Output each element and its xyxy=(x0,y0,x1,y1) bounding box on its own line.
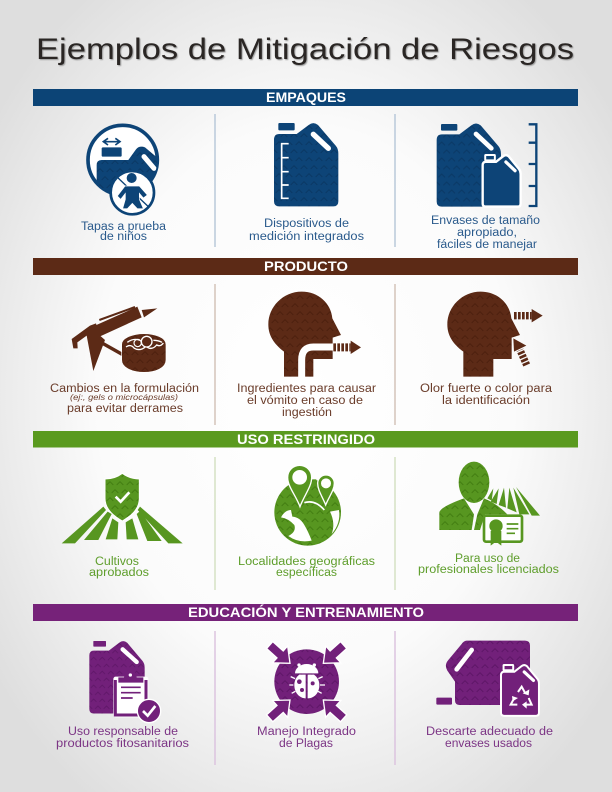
caption: ingredientes: ingestión xyxy=(282,407,332,419)
icon: head with vomit arrow xyxy=(268,292,361,378)
icon: integrated pest management xyxy=(262,637,351,727)
icon: globe with location pins xyxy=(274,465,341,546)
icon: jug with checklist xyxy=(89,641,161,723)
heading: educación xyxy=(33,604,578,621)
icon: caulking gun and capsules xyxy=(72,307,166,372)
icon: shield over crop rows xyxy=(62,473,183,543)
caption: descarte: Descarte adecuado de xyxy=(426,726,553,738)
heading: empaques xyxy=(33,89,578,106)
caption: localidades xyxy=(238,556,375,579)
caption: cultivos xyxy=(89,556,149,579)
caption: envases: Envases de tamaño xyxy=(431,215,540,227)
caption: para uso: profesionales licenciados xyxy=(418,564,559,576)
panel: educación xyxy=(33,604,578,765)
icon: head with odour arrows xyxy=(447,292,543,377)
icon: jug with measuring scale xyxy=(274,123,338,206)
caption: cambios: para evitar derrames xyxy=(67,403,183,415)
caption: manejo integrado xyxy=(257,726,356,750)
heading: uso restringido xyxy=(33,431,578,448)
caption: envases: fáciles de manejar xyxy=(437,239,537,251)
icon: licensed professional xyxy=(439,462,540,546)
caption: dispositivos xyxy=(249,218,364,243)
caption: envases xyxy=(431,215,540,251)
caption: localidades: específicas xyxy=(276,567,337,579)
panel: uso restringido xyxy=(33,431,578,590)
icon: child-resistant cap xyxy=(88,125,160,214)
caption: cultivos: Cultivos xyxy=(95,556,139,568)
panel: producto xyxy=(33,258,578,425)
caption: cultivos: aprobados xyxy=(89,567,149,579)
heading: educación: EDUCACIÓN Y ENTRENAMIENTO xyxy=(188,605,424,620)
caption: descarte: envases usados xyxy=(445,738,532,750)
caption: para uso: Para uso de xyxy=(455,553,520,565)
caption: manejo integrado: de Plagas xyxy=(279,738,333,750)
heading: uso restringido: USO RESTRINGIDO xyxy=(237,432,375,447)
icon: disposal of used containers xyxy=(436,641,539,716)
caption: olor: Olor fuerte o color para xyxy=(420,383,553,395)
caption: manejo integrado: Manejo Integrado xyxy=(257,726,356,738)
caption: ingredientes: el vómito en caso de xyxy=(247,395,363,407)
title: Ejemplos de Mitigación de Riesgos xyxy=(36,33,574,66)
caption: dispositivos: medición integrados xyxy=(249,231,364,243)
caption: cambios: Cambios en la formulación xyxy=(50,383,199,395)
caption: envases: apropiado, xyxy=(457,227,517,239)
caption: localidades: Localidades geográficas xyxy=(238,556,375,568)
caption: cambios: (ej:, gels o microcápsulas) xyxy=(70,393,178,402)
heading: producto xyxy=(33,258,578,275)
caption: uso responsable xyxy=(56,726,189,750)
caption: tapas: de niños xyxy=(100,231,147,243)
caption: ingredientes: Ingredientes para causar xyxy=(237,383,376,395)
caption: olor: la identificación xyxy=(442,395,530,407)
caption: olor xyxy=(420,383,553,407)
icon: jugs of appropriate size xyxy=(437,123,536,207)
caption: ingredientes xyxy=(237,383,376,419)
caption: cambios xyxy=(50,383,199,415)
caption: descarte xyxy=(426,726,553,750)
caption: tapas: Tapas a prueba xyxy=(81,221,167,233)
caption: tapas xyxy=(81,221,167,243)
panel: empaques xyxy=(33,89,578,251)
caption: dispositivos: Dispositivos de xyxy=(264,218,349,230)
heading: producto: PRODUCTO xyxy=(264,259,348,274)
caption: uso responsable: Uso responsable de xyxy=(68,726,178,738)
caption: uso responsable: productos fitosanitarios xyxy=(56,738,189,750)
caption: para uso xyxy=(418,553,559,576)
heading: empaques: EMPAQUES xyxy=(266,90,346,105)
